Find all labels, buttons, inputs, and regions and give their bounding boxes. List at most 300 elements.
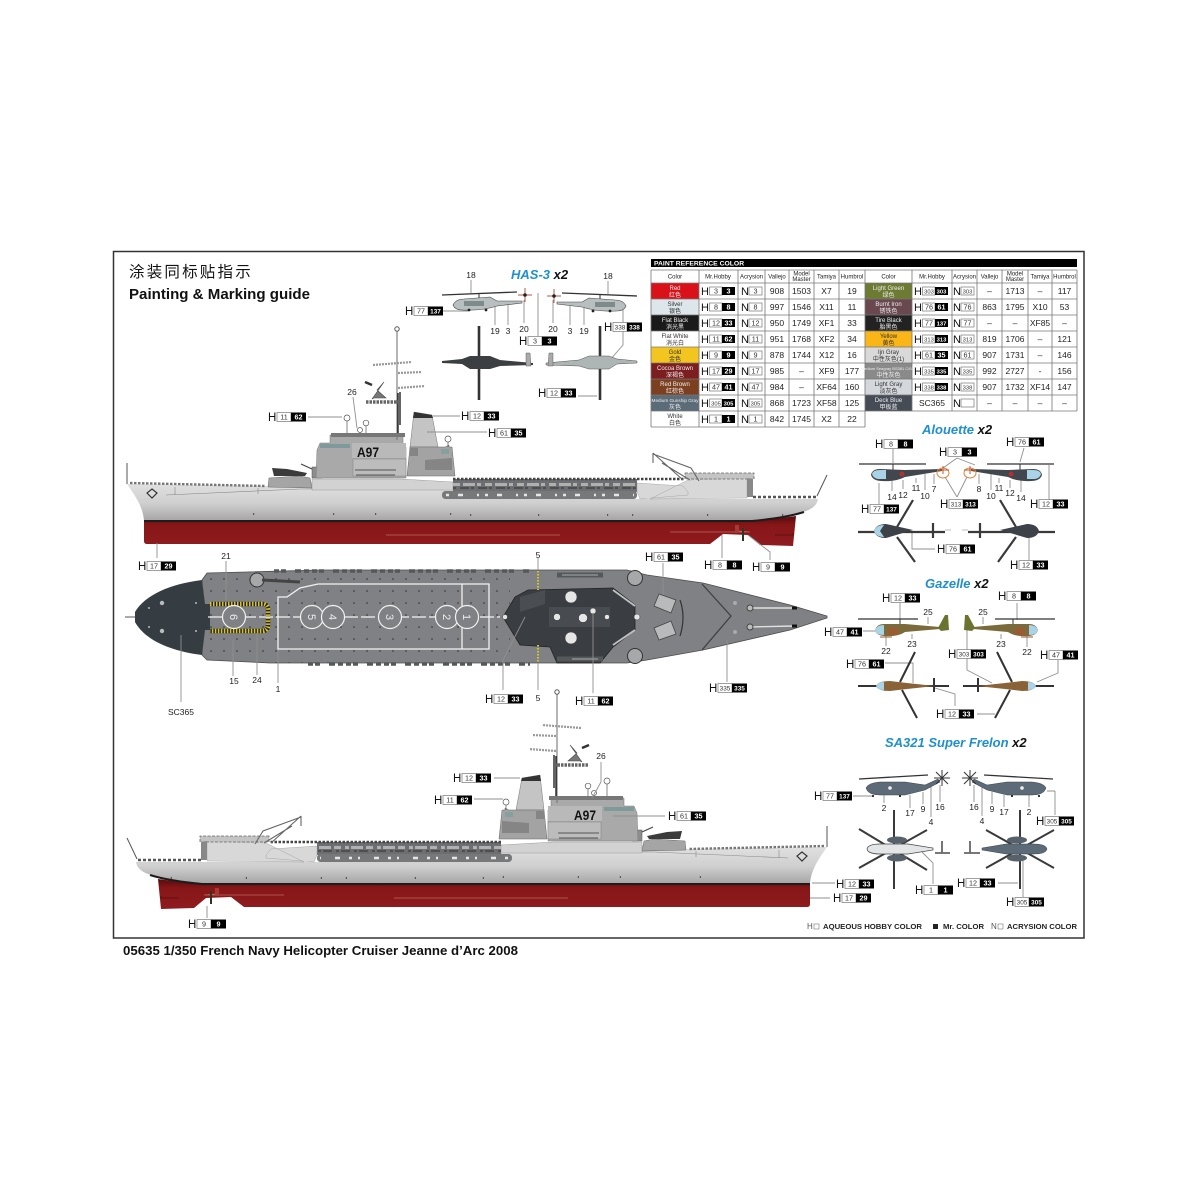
12 33: H: [957, 878, 965, 890]
338 338: 338: [615, 325, 626, 332]
Mr.Hobby and Acrysion codes left: H: [701, 334, 709, 346]
47 41: 41: [850, 628, 858, 637]
9 9: [752, 562, 790, 574]
17 29 bow: H: [833, 893, 841, 905]
77 137: H: [861, 504, 869, 516]
Mr.Hobby and Acrysion codes left: N: [741, 334, 749, 346]
12 33 lower: [936, 709, 974, 721]
HAS-3 numbers: 20: [548, 324, 558, 334]
Mr.Hobby and Acrysion codes left: H: [701, 366, 709, 378]
landing zone hazard marking: [210, 604, 268, 631]
chip names left: Red: [669, 286, 681, 292]
12 33 lower: 33: [962, 710, 970, 719]
335 335: [709, 683, 747, 695]
12 33: H: [538, 388, 546, 400]
Alouette numbers: 11: [912, 483, 921, 493]
3 3: H: [939, 447, 947, 459]
brand equivalents left: 1768: [792, 334, 811, 344]
Mr.Hobby and Acrysion codes left: N: [741, 398, 749, 410]
Mr.Hobby and Acrysion codes right: 61: [964, 350, 972, 360]
Gazelle top view right: [963, 652, 1054, 718]
Super Frelon numbers: 17: [905, 808, 915, 818]
Mr.Hobby and Acrysion codes right: 35: [938, 350, 946, 360]
ship: starboard side profile: [127, 690, 827, 909]
Alouette numbers: [887, 483, 1026, 503]
305 305: 305: [1061, 819, 1072, 826]
launch decks: [654, 594, 676, 640]
brand equivalents left: XF64: [816, 382, 837, 392]
5 lower: 5: [536, 693, 541, 703]
brand equivalents right: X10: [1032, 302, 1048, 312]
11 62: H: [268, 412, 276, 424]
12 33: 12: [894, 594, 902, 603]
Alouette numbers: 10: [920, 491, 930, 501]
launcher: [272, 468, 307, 476]
8 8: 8: [718, 561, 722, 570]
flight deck markings: [278, 584, 489, 649]
12 33 lower ship: [453, 773, 491, 785]
12 33: 12: [473, 412, 481, 421]
chip names right: Tire Black: [875, 318, 903, 324]
11 62: [268, 412, 306, 424]
12 33: 33: [1056, 500, 1064, 509]
Alouette top view left: [858, 500, 951, 562]
brand equivalents left: 951: [770, 334, 784, 344]
sheet frame: [114, 252, 1084, 938]
61 35 lower ship: 35: [694, 812, 702, 821]
11 62 lower ship: [434, 795, 472, 807]
legend: AQUEOUS HOBBY COLOR: [823, 922, 923, 931]
61 35: 35: [514, 429, 522, 438]
chip names left: [652, 286, 699, 427]
brand equivalents left: 1749: [792, 318, 811, 328]
table headers: Tamiya: [817, 274, 837, 280]
yardarms: [373, 362, 425, 388]
brand equivalents right: 1706: [1006, 334, 1025, 344]
12 33: 33: [908, 594, 916, 603]
bridge rail: [331, 433, 405, 437]
8 8: 8: [732, 561, 736, 570]
77 137: 77: [826, 792, 834, 801]
brand equivalents right: –: [987, 286, 992, 296]
brand equivalents right: 147: [1057, 382, 1072, 392]
brand equivalents left: 177: [845, 366, 859, 376]
brand equivalents left: 985: [770, 366, 784, 376]
brand equivalents left: 878: [770, 350, 784, 360]
brand equivalents right: –: [1062, 318, 1067, 328]
brand equivalents left: 997: [770, 302, 784, 312]
12 33: 12: [1042, 500, 1050, 509]
21: 21: [221, 551, 231, 561]
ship: deck plan: [125, 570, 827, 664]
brand equivalents left: 1723: [792, 398, 811, 408]
Mr.Hobby and Acrysion codes left: 9: [714, 350, 718, 360]
76 61: 76: [1018, 438, 1026, 447]
bow chevron: [702, 584, 731, 650]
Mr.Hobby and Acrysion codes right: H: [914, 302, 922, 314]
61 35 lower ship: 61: [680, 812, 688, 821]
Super Frelon top view left: [859, 810, 950, 889]
Gazelle side view mirrored: [964, 615, 1055, 637]
forward gun deckhouse: [268, 476, 312, 488]
brand equivalents left: 842: [770, 414, 784, 424]
9 9: H: [752, 562, 760, 574]
Super Frelon side view: [859, 770, 950, 797]
9 9 stern: H: [188, 919, 196, 931]
Mr.Hobby and Acrysion codes left: 47: [712, 382, 720, 392]
brand equivalents left: X12: [819, 350, 834, 360]
1 1: H: [915, 885, 923, 897]
Alouette numbers: 11: [995, 483, 1004, 493]
hull number top: A97: [357, 445, 379, 460]
Mr.Hobby and Acrysion codes right: N: [953, 334, 961, 346]
footer product line: 05635 1/350 French Navy Helicopter Cruiser Jeanne d’Arc 2008: [123, 944, 518, 958]
brand equivalents left: X2: [821, 414, 832, 424]
5 upper: 5: [536, 550, 541, 560]
table headers: Vallejo: [768, 274, 786, 280]
Mr.Hobby and Acrysion codes right: N: [953, 382, 961, 394]
Mr.Hobby and Acrysion codes left: N: [741, 318, 749, 330]
Mr.Hobby and Acrysion codes right: 313: [924, 337, 934, 343]
303 303: [948, 649, 986, 661]
Mr.Hobby and Acrysion codes right: 338: [937, 385, 947, 391]
HAS-3 numbers: [466, 270, 613, 336]
Mr.Hobby and Acrysion codes left: 8: [726, 302, 730, 312]
brand equivalents right: 117: [1058, 286, 1072, 296]
76 61 lower: [937, 544, 975, 556]
brand equivalents right: 907: [982, 350, 997, 360]
Alouette numbers: 8: [977, 484, 982, 494]
12 33 lower ship: 12: [465, 774, 473, 783]
brand equivalents left: 22: [847, 414, 857, 424]
brand equivalents right: 146: [1057, 350, 1072, 360]
brand equivalents right: –: [1038, 350, 1043, 360]
Super Frelon numbers: 16: [969, 802, 979, 812]
panel: HAS-3 helicopters: [405, 267, 642, 400]
Mr.Hobby and Acrysion codes left: 3: [726, 286, 730, 296]
Mr.Hobby and Acrysion codes right: 313: [963, 337, 972, 343]
grey hull: [127, 482, 818, 521]
11 62 lower ship: 11: [446, 796, 454, 805]
HAS-3 side view: [442, 288, 532, 311]
underwater hull: [144, 516, 796, 546]
8 8: 8: [889, 440, 893, 449]
brand equivalents left: 1546: [792, 302, 811, 312]
12 33: 12: [550, 389, 558, 398]
chip names right: 中性灰色: [876, 371, 901, 379]
47 41: H: [824, 627, 832, 639]
Gazelle numbers: 25: [978, 607, 988, 617]
1: 1: [276, 684, 281, 694]
Mr.Hobby and Acrysion codes left: H: [701, 398, 709, 410]
panel: Gazelle helicopters: [824, 576, 1078, 721]
17 29: 17: [150, 562, 158, 571]
76 61 lower: 61: [964, 545, 972, 554]
303 303: 303: [959, 652, 970, 659]
table headers: Acrysion: [953, 274, 976, 280]
Mr.Hobby and Acrysion codes left: H: [701, 286, 709, 298]
chip names left: 红棕色: [666, 387, 684, 395]
Mr.Hobby and Acrysion codes right: 61: [925, 350, 933, 360]
Mr.Hobby and Acrysion codes right: 77: [964, 318, 972, 328]
305 305: 305: [1047, 819, 1058, 826]
12 33 lower: H: [1010, 560, 1018, 572]
landing spot numbers: 5: [305, 614, 317, 620]
47 41 right: [1040, 650, 1078, 662]
76 61: H: [846, 659, 854, 671]
26 lower: 26: [596, 751, 606, 761]
47 41 right: H: [1040, 650, 1048, 662]
17 29: 29: [164, 562, 172, 571]
Mr.Hobby and Acrysion codes right: 303: [937, 289, 947, 295]
panel: paint reference table: [651, 259, 1077, 427]
Mr.Hobby and Acrysion codes left: 305: [724, 401, 734, 407]
Mr.Hobby and Acrysion codes right: N: [953, 302, 961, 314]
Mr.Hobby and Acrysion codes right: N: [953, 350, 961, 362]
waterline: [144, 512, 804, 521]
table headers: Mr.Hobby: [919, 274, 945, 280]
11 62: 11: [280, 413, 288, 422]
Super Frelon numbers: 4: [980, 816, 985, 826]
11 62: 62: [294, 413, 302, 422]
legend: Mr. COLOR: [943, 922, 985, 931]
47 41: [824, 627, 862, 639]
Mr.Hobby and Acrysion codes left: 47: [752, 382, 760, 392]
61 35 deck: [645, 552, 683, 564]
8 8: H: [875, 439, 883, 451]
313 313: 313: [965, 502, 976, 509]
Mr.Hobby and Acrysion codes left: 9: [754, 350, 758, 360]
61 35: H: [488, 428, 496, 440]
Mr.Hobby and Acrysion codes left: 9: [726, 350, 730, 360]
table headers: Model: [1007, 272, 1023, 278]
legend: ACRYSION COLOR: [1007, 922, 1078, 931]
brand equivalents left: [770, 286, 859, 424]
chip names left: 灰色: [669, 403, 681, 411]
HAS-3 numbers: 18: [603, 271, 613, 281]
chip names right: Light Gray: [875, 382, 902, 388]
3 3: 3: [533, 337, 537, 346]
Mr.Hobby and Acrysion codes left: N: [741, 414, 749, 426]
11 62 deck: H: [575, 696, 583, 708]
chip names left: 金色: [669, 355, 681, 363]
17 29 bow: 17: [845, 894, 853, 903]
brand equivalents right: –: [1038, 286, 1043, 296]
brand equivalents right: –: [1062, 398, 1067, 408]
12 33: [882, 593, 920, 605]
Mr.Hobby and Acrysion codes left: 305: [711, 401, 721, 407]
brand equivalents right: 819: [982, 334, 997, 344]
Mr.Hobby and Acrysion codes left: H: [701, 382, 709, 394]
3 3: 3: [548, 337, 552, 346]
HAS-3 side view mirrored: [547, 289, 637, 312]
chip names left: 深褐色: [666, 371, 684, 379]
brand equivalents right: [982, 286, 1072, 408]
brand equivalents right: 2727: [1006, 366, 1025, 376]
12 33 lower: 12: [1022, 561, 1030, 570]
Mr.Hobby and Acrysion codes right: N: [953, 366, 961, 378]
brand equivalents right: XF14: [1030, 382, 1050, 392]
spheres: [344, 415, 451, 447]
12 33: 33: [488, 412, 496, 421]
Super Frelon numbers: 9: [921, 804, 926, 814]
76 61: 76: [858, 660, 866, 669]
77 137: 137: [886, 507, 897, 514]
11 62 lower ship: H: [434, 795, 442, 807]
brand equivalents right: 156: [1057, 366, 1072, 376]
24: 24: [252, 675, 262, 685]
island fittings: [502, 591, 640, 644]
Mr.Hobby and Acrysion codes left: H: [701, 414, 709, 426]
Alouette numbers: 7: [932, 484, 937, 494]
bridge island: [503, 588, 635, 663]
11 62 deck: 11: [587, 697, 595, 706]
Mr.Hobby and Acrysion codes right: 338: [963, 385, 972, 391]
17 29: H: [138, 561, 146, 573]
303 303: H: [948, 649, 956, 661]
Super Frelon numbers: 16: [935, 802, 945, 812]
Mr.Hobby and Acrysion codes right: H: [914, 318, 922, 330]
77 137: 137: [430, 309, 441, 316]
brand equivalents left: XF2: [819, 334, 835, 344]
bow and stern staffs: [127, 463, 827, 496]
61 35 deck: H: [645, 552, 653, 564]
77 137: [861, 504, 899, 516]
9 9 stern: [188, 919, 226, 931]
table heading bar: PAINT REFERENCE COLOR: [654, 260, 744, 268]
Alouette numbers: 12: [898, 490, 908, 500]
9 9 stern: 9: [216, 920, 220, 929]
61 35 lower ship: H: [668, 811, 676, 823]
chip names left: 白色: [669, 419, 681, 427]
313 313: H: [940, 499, 948, 511]
brand equivalents right: 1795: [1006, 302, 1025, 312]
chip names right: 中性灰色(1): [873, 355, 904, 363]
deck centreline: [208, 616, 500, 618]
338 338: H: [604, 322, 612, 334]
chip names right: Yellow: [880, 334, 898, 340]
bow deck rail: [130, 483, 265, 486]
table headers: Vallejo: [981, 274, 999, 280]
Mr.Hobby and Acrysion codes left: H: [701, 350, 709, 362]
brand equivalents right: 121: [1057, 334, 1072, 344]
Super Frelon heading: SA321 Super Frelon x2: [885, 735, 1027, 750]
Gazelle numbers: 23: [907, 639, 917, 649]
Mr.Hobby and Acrysion codes left: H: [701, 302, 709, 314]
callouts on ships: [138, 387, 874, 931]
HAS-3 numbers: 18: [466, 270, 476, 280]
Mr.Hobby and Acrysion codes right: 335: [924, 369, 934, 375]
12 33 bow: [836, 879, 874, 891]
chip names left: 消光黑: [666, 323, 684, 331]
Mr.Hobby and Acrysion codes left: 12: [752, 318, 760, 328]
title: [129, 263, 310, 303]
12 33 bow: 12: [848, 880, 856, 889]
3 3: [519, 336, 557, 348]
chip names right: 绿色: [882, 291, 895, 299]
77 137: [405, 306, 443, 318]
brand equivalents left: 19: [847, 286, 857, 296]
Mr.Hobby and Acrysion codes left: 3: [714, 286, 718, 296]
brand equivalents right: –: [987, 398, 992, 408]
Mr.Hobby and Acrysion codes left: 29: [724, 366, 732, 376]
61 35: [488, 428, 526, 440]
3 3: H: [519, 336, 527, 348]
12 33 bow: H: [836, 879, 844, 891]
hull details: [166, 487, 453, 495]
Mr.Hobby and Acrysion codes right: H: [914, 366, 922, 378]
15: 15: [229, 676, 239, 686]
landing spot numbers: 6: [227, 614, 239, 620]
flight deck rail: [453, 478, 685, 480]
Super Frelon numbers: 2: [882, 803, 887, 813]
Mr.Hobby and Acrysion codes left: 62: [724, 334, 732, 344]
12 33 deck: 33: [512, 695, 520, 704]
8 8: 8: [904, 440, 908, 449]
chip names left: Cocoa Brown: [657, 366, 693, 372]
legend: N: [991, 922, 997, 931]
313 313: 313: [951, 502, 962, 509]
Mr.Hobby and Acrysion codes right: 61: [938, 302, 946, 312]
Mr.Hobby and Acrysion codes right: 313: [937, 337, 947, 343]
Alouette side view mirrored: [964, 464, 1054, 481]
chip names right: 淡灰色: [879, 387, 898, 395]
chip names left: Flat Black: [662, 318, 689, 324]
chip names right: Deck Blue: [875, 398, 903, 404]
main deck block: [312, 479, 453, 490]
brand equivalents left: XF1: [819, 318, 835, 328]
chip names right: Ijn Gray: [878, 350, 899, 356]
masts and aerials: [396, 327, 398, 440]
hazard ticks: [537, 571, 539, 663]
brand equivalents left: 34: [847, 334, 857, 344]
Mr.Hobby and Acrysion codes right: 77: [925, 318, 933, 328]
Mr.Hobby and Acrysion codes right: H: [914, 286, 922, 298]
Gazelle numbers: 25: [923, 607, 933, 617]
305 305: [1036, 816, 1074, 828]
HAS-3 top view left: [442, 326, 533, 400]
HAS-3 numbers: 19: [579, 326, 589, 336]
table headers: [668, 272, 1076, 283]
Super Frelon numbers: [882, 802, 1032, 827]
table headers: Acrysion: [740, 274, 763, 280]
Gazelle heading: Gazelle x2: [925, 576, 989, 591]
Mr.Hobby and Acrysion codes right: 335: [937, 369, 947, 375]
brand equivalents left: 1745: [792, 414, 811, 424]
brand equivalents left: 950: [770, 318, 784, 328]
Mr.Hobby and Acrysion codes left: 8: [754, 302, 758, 312]
HAS-3 numbers: 19: [490, 326, 500, 336]
12 33 lower ship: 33: [480, 774, 488, 783]
11 62 deck: 62: [602, 697, 610, 706]
Mr.Hobby and Acrysion codes left: N: [741, 286, 749, 298]
Mr.Hobby and Acrysion codes right: [914, 286, 974, 410]
17 29 bow: 29: [860, 894, 868, 903]
Mr.Hobby and Acrysion codes left: N: [741, 382, 749, 394]
brand equivalents left: –: [799, 366, 804, 376]
Mr.Hobby and Acrysion codes left: 1: [714, 414, 718, 424]
side gallery: [442, 479, 637, 499]
Mr.Hobby and Acrysion codes left: 17: [752, 366, 760, 376]
table headers: Color: [881, 274, 896, 280]
313 313: [940, 499, 978, 511]
Mr.Hobby and Acrysion codes right: H: [914, 334, 922, 346]
Mr.Hobby and Acrysion codes left: 17: [712, 366, 720, 376]
47 41: 47: [836, 628, 844, 637]
8 8: [998, 591, 1036, 603]
chip names right: 锈铁色: [879, 307, 898, 315]
Gazelle numbers: [881, 607, 1032, 657]
